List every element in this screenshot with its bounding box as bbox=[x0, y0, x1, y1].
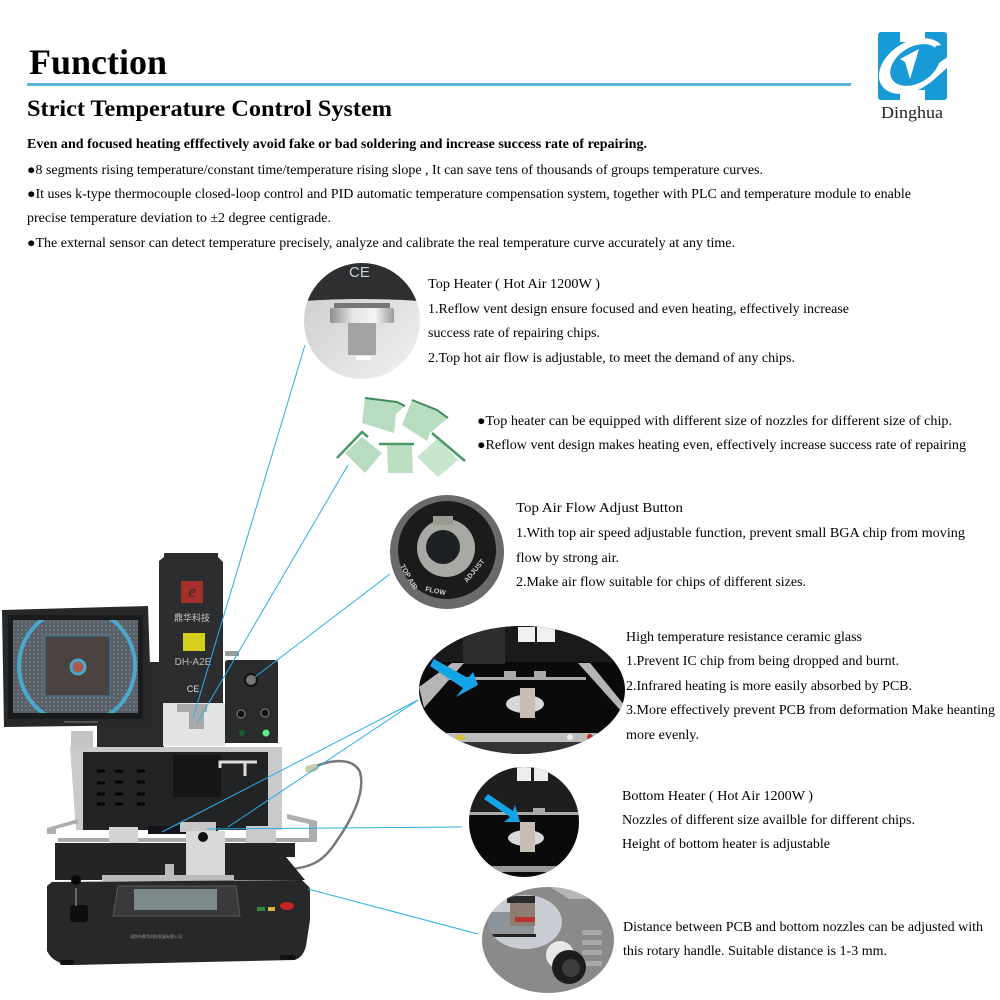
heater tower: 鼎华科技 bbox=[174, 612, 210, 623]
frame and back plate bbox=[70, 747, 282, 830]
detail: rotary handle photo bbox=[482, 887, 614, 993]
text block: bottom heater: Height of bottom heater is adjustable bbox=[622, 836, 830, 851]
gooseneck lamp bbox=[291, 761, 361, 869]
text block: ceramic glass: 1.Prevent IC chip from being dropped and burnt. bbox=[626, 653, 899, 668]
text block: top heater bbox=[428, 276, 849, 365]
detail: air flow knob bbox=[390, 495, 504, 609]
detail: air flow knob: ADJUST bbox=[463, 558, 487, 584]
subtitle: Strict Temperature Control System bbox=[27, 96, 392, 121]
text block: nozzles: ●Reflow vent design makes heating even, effectively increase success rate of repairing bbox=[477, 437, 966, 452]
detail: nozzles bbox=[337, 398, 465, 477]
logo: Dinghua bbox=[869, 27, 955, 122]
machine photo bbox=[2, 553, 361, 965]
logo: Dinghua: Dinghua bbox=[881, 103, 944, 122]
control base bbox=[47, 875, 310, 965]
text block: top heater: success rate of repairing chips. bbox=[428, 325, 600, 340]
text block: nozzles bbox=[477, 413, 966, 452]
text block: intro bbox=[27, 136, 911, 250]
lower body bbox=[55, 843, 305, 881]
text block: intro: Even and focused heating efffectively avoid fake or bad soldering and increase success rate of repairing. bbox=[27, 136, 647, 151]
text block: air flow: flow by strong air. bbox=[516, 550, 619, 565]
PCB rails bbox=[47, 814, 317, 883]
text block: top heater: 2.Top hot air flow is adjustable, to meet the demand of any chips. bbox=[428, 350, 795, 365]
detail: bottom heater photo bbox=[469, 767, 579, 877]
detail: ceramic glass photo bbox=[419, 626, 625, 754]
text block: air flow bbox=[516, 500, 965, 589]
detail: top heater photo: CE bbox=[349, 264, 370, 281]
text block: air flow: Top Air Flow Adjust Button bbox=[516, 500, 683, 515]
text block: bottom heater bbox=[622, 788, 915, 851]
text block: ceramic glass: 3.More effectively prevent PCB from deformation Make heanting bbox=[626, 702, 995, 717]
text block: top heater: 1.Reflow vent design ensure focused and even heating, effectively increase bbox=[428, 301, 849, 316]
heater tower bbox=[159, 553, 223, 704]
heading underline bbox=[27, 83, 851, 86]
text block: ceramic glass: High temperature resistance ceramic glass bbox=[626, 629, 862, 644]
control base: 深圳市鼎华科技发展有限公司 bbox=[130, 933, 182, 939]
text block: intro: ●It uses k-type thermocouple closed-loop control and PID automatic temperature compensation system, together with PLC and temperature module to enable bbox=[27, 186, 911, 201]
text block: ceramic glass: more evenly. bbox=[626, 727, 699, 742]
text block: rotary handle: Distance between PCB and bottom nozzles can be adjusted with bbox=[623, 919, 983, 934]
nozzle block bbox=[163, 703, 225, 746]
text block: ceramic glass bbox=[626, 629, 995, 742]
detail: air flow knob: FLOW bbox=[425, 586, 447, 597]
text block: intro: ●8 segments rising temperature/constant time/temperature rising slope , It can save tens of thousands of groups temperature curves. bbox=[27, 162, 763, 177]
heater tower: CE bbox=[187, 684, 199, 694]
monitor bbox=[2, 606, 164, 748]
text block: intro: precise temperature deviation to ±2 degree centigrade. bbox=[27, 210, 331, 225]
text block: bottom heater: Nozzles of different size availble for different chips. bbox=[622, 812, 915, 827]
text block: intro: ●The external sensor can detect temperature precisely, analyze and calibrate the real temperature curve accurately at any time. bbox=[27, 235, 735, 250]
heater tower: DH-A2E bbox=[175, 657, 212, 668]
text block: top heater: Top Heater ( Hot Air 1200W ) bbox=[428, 276, 600, 291]
text block: bottom heater: Bottom Heater ( Hot Air 1200W ) bbox=[622, 788, 813, 803]
detail: air flow knob: TOP AIR bbox=[398, 564, 418, 591]
text block: rotary handle: this rotary handle. Suitable distance is 1-3 mm. bbox=[623, 943, 887, 958]
heater tower: e bbox=[188, 582, 196, 601]
callout lines bbox=[162, 345, 478, 934]
title: Function bbox=[29, 42, 167, 82]
control panel bbox=[225, 651, 278, 743]
text block: rotary handle bbox=[623, 919, 983, 958]
text block: nozzles: ●Top heater can be equipped with different size of nozzles for different size of chip. bbox=[477, 413, 952, 428]
text block: ceramic glass: 2.Infrared heating is more easily absorbed by PCB. bbox=[626, 678, 912, 693]
text block: air flow: 2.Make air flow suitable for chips of different sizes. bbox=[516, 574, 806, 589]
text block: air flow: 1.With top air speed adjustable function, prevent small BGA chip from moving bbox=[516, 525, 965, 540]
detail: top heater photo bbox=[304, 263, 420, 379]
